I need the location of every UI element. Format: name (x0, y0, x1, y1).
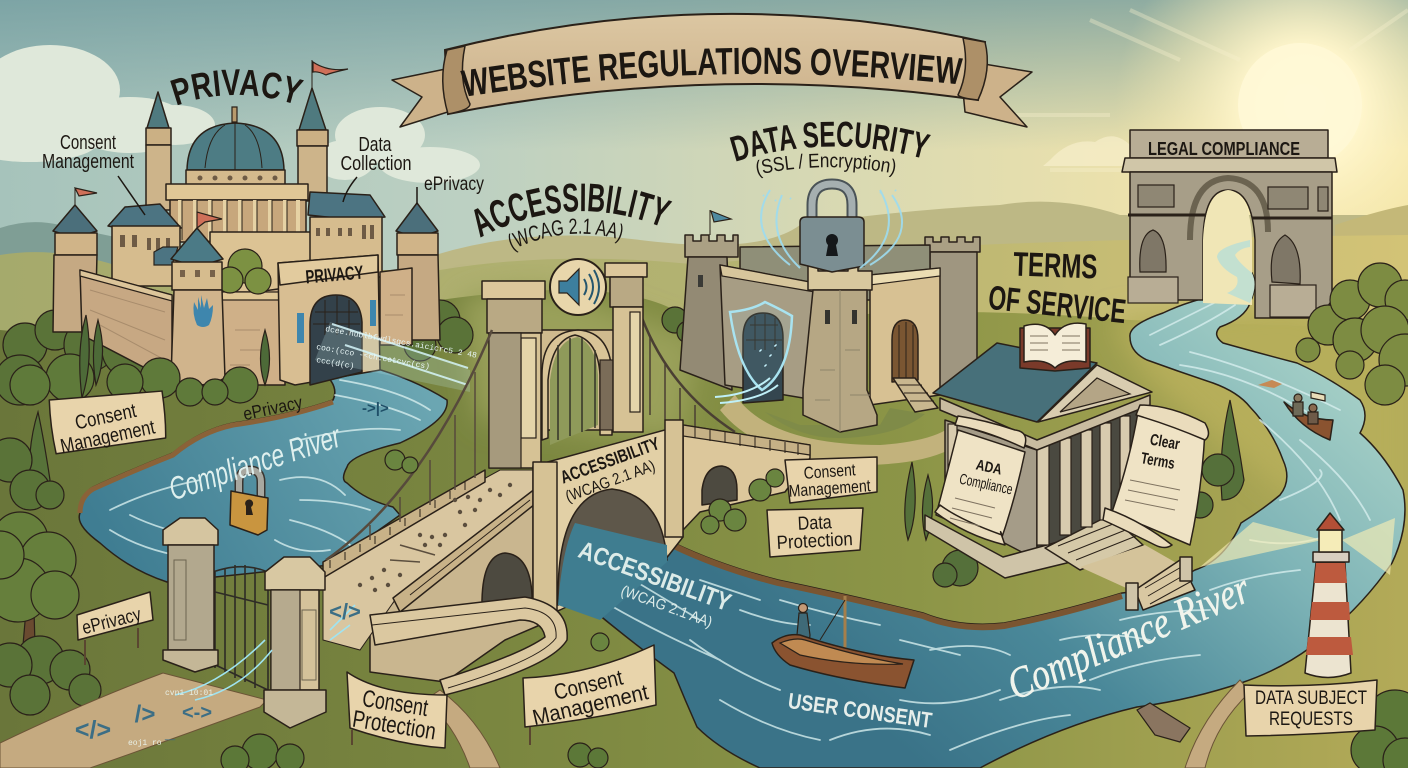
cypress trees (80, 315, 270, 398)
plaza and steps (925, 515, 1195, 610)
banner body (445, 14, 985, 114)
lower arch (482, 553, 532, 620)
bushes in front of castle (10, 354, 258, 406)
callout: data collection (340, 134, 412, 202)
sign: consent management upper: Management (59, 416, 157, 458)
far fields (0, 235, 1408, 400)
stone gate: eoj1 ro (128, 739, 162, 748)
stream of code from gate (315, 322, 478, 392)
piers (533, 420, 683, 620)
sky background (0, 0, 1408, 300)
left bushes behind castle (0, 300, 699, 405)
lighthouse (1200, 513, 1395, 678)
stream of code from gate: coo:(cco -<ch.cetcvc(cs) (315, 343, 431, 372)
small flag (197, 212, 222, 228)
code glyphs: <-> (182, 702, 212, 724)
back wall (740, 245, 930, 300)
callout: consent management (42, 132, 145, 215)
bottom bushes (221, 690, 1408, 768)
stream of code from gate: ccc(d(c) (315, 356, 355, 372)
water ripples (585, 290, 1370, 750)
cypress beside temple (905, 400, 1244, 587)
stone gate (75, 518, 361, 748)
main compliance river (558, 240, 1405, 768)
heading: terms of service: OF SERVICE (987, 279, 1128, 331)
ribbon tails (392, 60, 1032, 127)
arch panels (1138, 185, 1328, 211)
left tower (680, 210, 738, 390)
back cables (642, 318, 735, 432)
roof (933, 343, 1097, 422)
entablature (940, 395, 1150, 450)
privacy castle (53, 60, 440, 385)
sign: eprivacy (77, 592, 153, 665)
sign: data protection (767, 508, 863, 557)
callout: eprivacy: ePrivacy (424, 174, 484, 195)
callout: data collection: Collection (340, 153, 412, 175)
left pillar (163, 518, 218, 672)
icon: open book (1020, 323, 1090, 371)
scroll: clear terms (1103, 405, 1208, 548)
switchback ramp (370, 597, 567, 695)
stone gate: cvn1 10:01 (165, 689, 213, 698)
label: eprivacy on bank: ePrivacy (241, 392, 304, 424)
sign: consent management middle: Management (788, 476, 871, 501)
sign: consent protection: Consent (360, 685, 430, 722)
callout: data collection: Data (358, 134, 392, 156)
sign: consent management upper (49, 391, 166, 458)
scroll: ada compliance: Compliance (958, 471, 1014, 499)
scroll rolls (443, 38, 987, 114)
code glyphs: </> (75, 716, 111, 744)
scroll: clear terms: Terms (1140, 450, 1176, 473)
title banner (391, 12, 1033, 128)
small boat (1258, 380, 1333, 440)
sign: data subject requests (1244, 680, 1377, 736)
back towers (146, 60, 348, 210)
sign: data subject requests: DATA SUBJECT (1255, 688, 1367, 709)
compliance river left label: Compliance River (164, 418, 346, 507)
stream of code from gate: dcee.nublbfwdlsgcs.aicicrc5 2 48 (324, 325, 478, 361)
code glyphs (75, 599, 361, 744)
heading: data security: (SSL / Encryption) (756, 154, 896, 178)
arch sign: LEGAL COMPLIANCE (1148, 139, 1300, 159)
bridge arch panel (535, 330, 615, 445)
castle walls (80, 268, 412, 385)
left river (79, 358, 447, 582)
curtain wall (720, 265, 940, 405)
gate sign: PRIVACY (305, 263, 365, 289)
big tree, left (0, 412, 101, 715)
water padlock (230, 470, 268, 535)
main land (0, 290, 1408, 768)
sign: data protection: Protection (776, 529, 853, 554)
sign: consent management bottom: Consent (551, 665, 625, 705)
right tower (396, 187, 440, 340)
pediment (1038, 365, 1152, 422)
sign: consent management bottom: Management (530, 679, 651, 730)
shield (715, 302, 792, 403)
river accessibility label: ACCESSIBILITY (575, 536, 735, 617)
river under arch (558, 523, 667, 620)
left tower (53, 188, 97, 332)
castle lawn (765, 408, 925, 438)
icon: blue hand (193, 295, 213, 327)
icon: speaker medallion (550, 259, 606, 315)
front arch wall: (WCAG 2.1 AA) (563, 458, 658, 506)
scroll: ada compliance: ADA (974, 457, 1004, 479)
front arch wall (533, 420, 683, 620)
bridge (323, 259, 810, 695)
boat with rower (772, 596, 914, 688)
sign: eprivacy: ePrivacy (80, 604, 144, 639)
sign: data subject requests: REQUESTS (1269, 709, 1353, 730)
beige path around castle (720, 395, 980, 465)
front round tower (171, 228, 225, 385)
right house (308, 192, 385, 277)
arch of legal compliance (1122, 130, 1337, 318)
left house (108, 204, 181, 286)
code glyphs: _ (164, 722, 176, 742)
callout: consent management: Management (42, 151, 134, 173)
code glyphs: /> (135, 701, 155, 728)
callout: eprivacy (417, 174, 484, 204)
center tower (803, 265, 877, 432)
river banks (674, 546, 1122, 627)
gatehouse (278, 255, 380, 385)
text arrows in river: ->|> (362, 400, 389, 417)
code glyphs: </> (329, 599, 361, 624)
arch opening (558, 489, 667, 605)
arch opening (1203, 190, 1252, 305)
wall under deck (370, 490, 540, 682)
columns (948, 416, 1130, 545)
light beams (1200, 518, 1395, 575)
right pillar (264, 557, 326, 728)
river labels (164, 418, 1257, 733)
temple of terms (905, 323, 1244, 610)
code stream at gate (175, 605, 355, 700)
path bottom left (0, 673, 267, 768)
river through arch (1217, 240, 1255, 303)
main deck (323, 330, 540, 650)
distant hills (0, 202, 1408, 330)
heading: data security: DATA SECURITY (730, 122, 931, 162)
callout: consent management: Consent (60, 132, 116, 154)
data swirl (761, 190, 902, 268)
left pylon (482, 281, 545, 468)
right tower (925, 237, 980, 390)
sign: consent management bottom (523, 645, 656, 745)
clouds (0, 45, 480, 183)
heading: privacy: PRIVACY (170, 69, 304, 106)
heading: privacy (170, 69, 304, 106)
scroll: ada compliance (935, 416, 1026, 545)
sign: consent management middle (785, 457, 877, 503)
mid bushes (385, 450, 784, 651)
sign: data protection: Data (797, 512, 833, 535)
scroll: clear terms: Clear (1149, 432, 1181, 454)
right woods (1296, 263, 1408, 405)
user consent label: USER CONSENT (787, 688, 934, 733)
sign: consent protection: Protection (351, 706, 438, 745)
river wcag label: (WCAG 2.1 AA) (619, 582, 715, 631)
temple walls (945, 420, 1037, 560)
colonnade (166, 184, 328, 292)
title text: WEBSITE REGULATIONS OVERVIEW (460, 47, 963, 96)
stairs (893, 378, 938, 412)
heading: accessibility: (WCAG 2.1 AA) (508, 218, 622, 252)
right pylon (605, 263, 647, 432)
bridge sign text: ACCESSIBILITY (558, 433, 662, 488)
sign: consent protection (347, 672, 447, 748)
central dome (186, 107, 285, 185)
security castle (680, 184, 980, 465)
sign: consent management upper: Consent (73, 400, 139, 434)
right span (683, 425, 810, 530)
heading: accessibility: ACCESSIBILITY (474, 184, 672, 238)
statues (1140, 230, 1300, 284)
heading: terms of service (987, 246, 1128, 331)
heading: data security (730, 122, 931, 178)
rock (1137, 703, 1190, 742)
heading: terms of service: TERMS (1013, 246, 1098, 286)
iron gate (205, 565, 268, 690)
compliance river right label: Compliance River (1000, 563, 1257, 710)
bush on wall (217, 249, 271, 294)
sign: consent management middle: Consent (803, 460, 856, 483)
big padlock (800, 184, 864, 272)
